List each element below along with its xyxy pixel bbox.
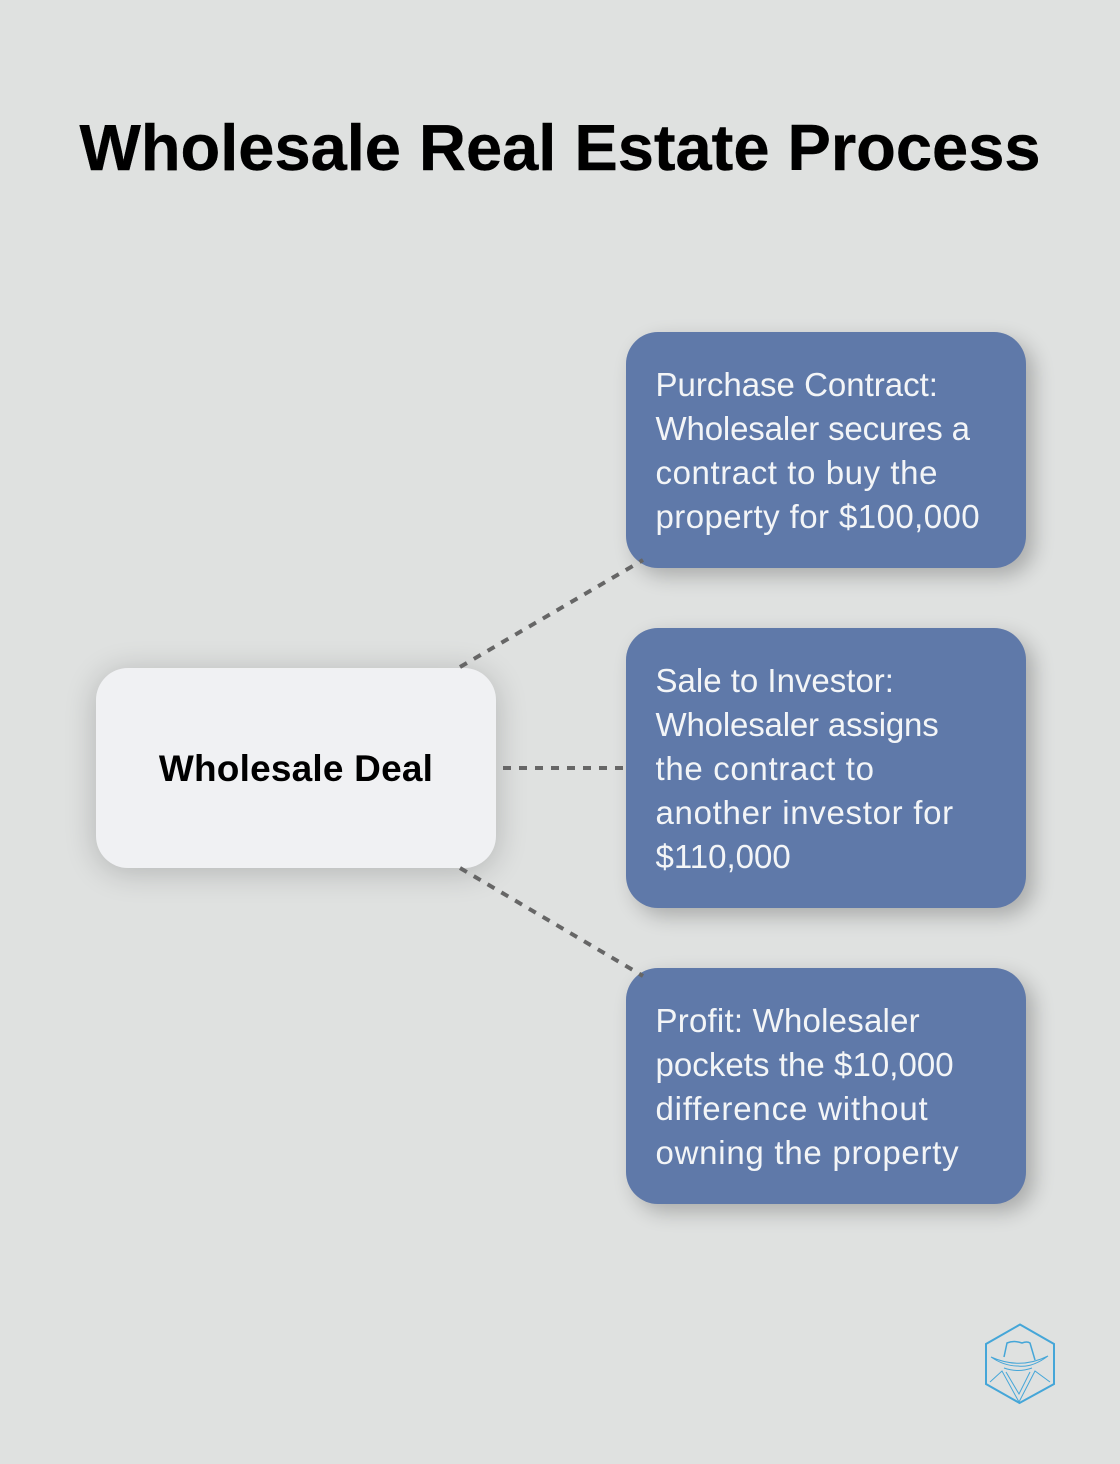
sale to investor text: another investor for: [656, 794, 954, 831]
sale to investor text: [656, 662, 954, 875]
icon: logo hexagon with hat: [985, 1323, 1055, 1404]
purchase contract text: Wholesaler secures a: [656, 410, 970, 447]
sale to investor text: $110,000: [656, 838, 791, 875]
profit text: pockets the $10,000: [656, 1046, 954, 1083]
purchase contract text: [656, 366, 980, 535]
sale to investor text: Sale to Investor:: [656, 662, 894, 699]
panel: sale to investor: [626, 628, 1026, 908]
purchase contract text: Purchase Contract:: [656, 366, 938, 403]
title: Wholesale Real Estate Process: [79, 111, 1040, 184]
profit text: [656, 1002, 959, 1171]
panel: profit: [626, 968, 1026, 1204]
panel: wholesale deal: [96, 668, 496, 868]
profit text: Profit: Wholesaler: [656, 1002, 920, 1039]
profit text: owning the property: [656, 1134, 959, 1171]
panel: purchase contract: [626, 332, 1026, 568]
sale to investor text: Wholesaler assigns: [656, 706, 939, 743]
panel heading: Wholesale Deal: [159, 748, 433, 789]
purchase contract text: property for $100,000: [656, 498, 980, 535]
sale to investor text: the contract to: [656, 750, 875, 787]
profit text: difference without: [656, 1090, 928, 1127]
purchase contract text: contract to buy the: [656, 454, 938, 491]
